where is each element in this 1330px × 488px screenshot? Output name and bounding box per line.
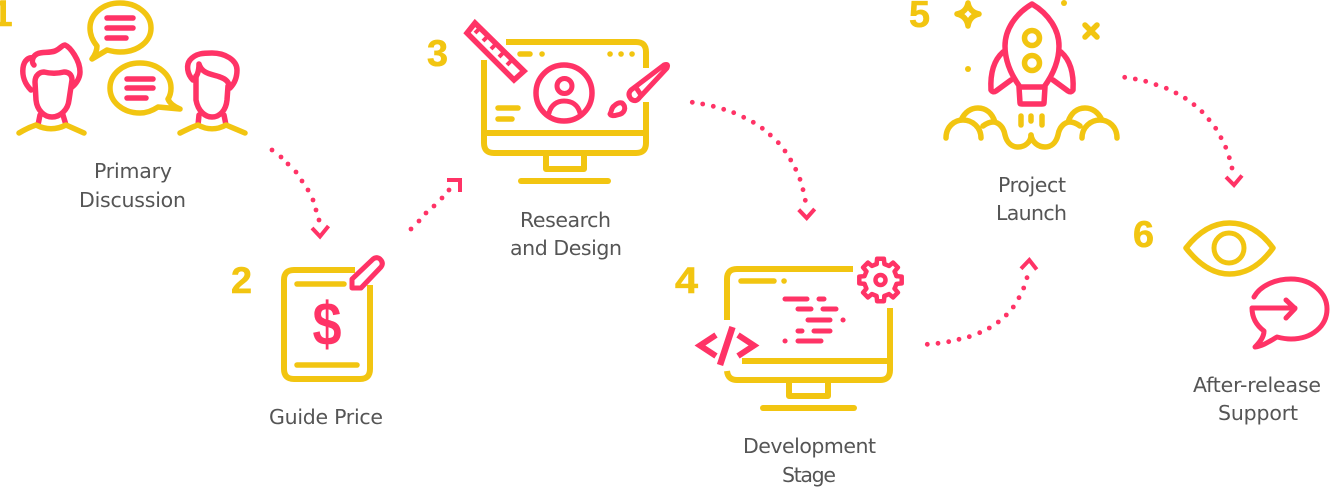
- label: Development: [743, 434, 876, 458]
- label: Discussion: [79, 188, 186, 212]
- icon: left person: [19, 45, 84, 133]
- label: Stage: [782, 463, 836, 487]
- step 1: primary discussion: [0, 0, 245, 212]
- icon: price document: [284, 258, 382, 379]
- number 3: 3: [427, 33, 448, 74]
- label: Guide Price: [269, 405, 383, 429]
- arrow: step 5 to step 6: [1122, 75, 1242, 185]
- icon: rocket: [991, 4, 1073, 104]
- icon: user avatar: [536, 65, 592, 121]
- arrow: step 3 to step 4: [690, 100, 815, 218]
- arrow: step 4 to step 5: [925, 260, 1037, 347]
- icon: pencil: [352, 258, 382, 288]
- arrow: step 2 to step 3: [409, 180, 460, 231]
- label: Research: [520, 208, 611, 232]
- label: Support: [1218, 401, 1298, 425]
- icon: eye: [1186, 223, 1273, 274]
- label: [510, 208, 622, 260]
- dollar sign: $: [312, 290, 342, 358]
- icon: code brackets: [700, 327, 754, 365]
- label: [79, 159, 186, 212]
- icon: gear: [859, 259, 902, 301]
- number 4: 4: [675, 260, 698, 301]
- label: Primary: [94, 159, 172, 183]
- icon: speech bubble with arrow: [1252, 279, 1327, 347]
- label: [1193, 373, 1321, 425]
- icon: upper speech bubble: [90, 3, 151, 59]
- step 6: after-release support: [1133, 214, 1327, 425]
- label: [743, 434, 876, 487]
- icon: paint brush: [610, 64, 668, 116]
- label: After-release: [1193, 373, 1321, 397]
- icon: monitor: [484, 42, 646, 181]
- label: and Design: [510, 236, 622, 260]
- icon: right person: [180, 53, 245, 133]
- step 3: research and design: [427, 23, 668, 260]
- step 2: guide price: [231, 258, 383, 429]
- step 5: project launch: [909, 0, 1117, 225]
- icon: star and sparkles: [957, 0, 1097, 72]
- arrow: step 1 to step 2: [270, 148, 328, 236]
- code lines: [785, 299, 843, 341]
- number 2: 2: [231, 260, 252, 301]
- label: [996, 173, 1067, 225]
- icon: ruler: [467, 23, 524, 80]
- step 4: development stage: [675, 259, 902, 487]
- icon: monitor: [727, 269, 890, 408]
- label: Launch: [996, 201, 1067, 225]
- number 6: 6: [1133, 214, 1154, 255]
- icon: lower speech bubble: [110, 63, 180, 113]
- label: Project: [998, 173, 1066, 197]
- icon: flames and clouds: [946, 108, 1117, 147]
